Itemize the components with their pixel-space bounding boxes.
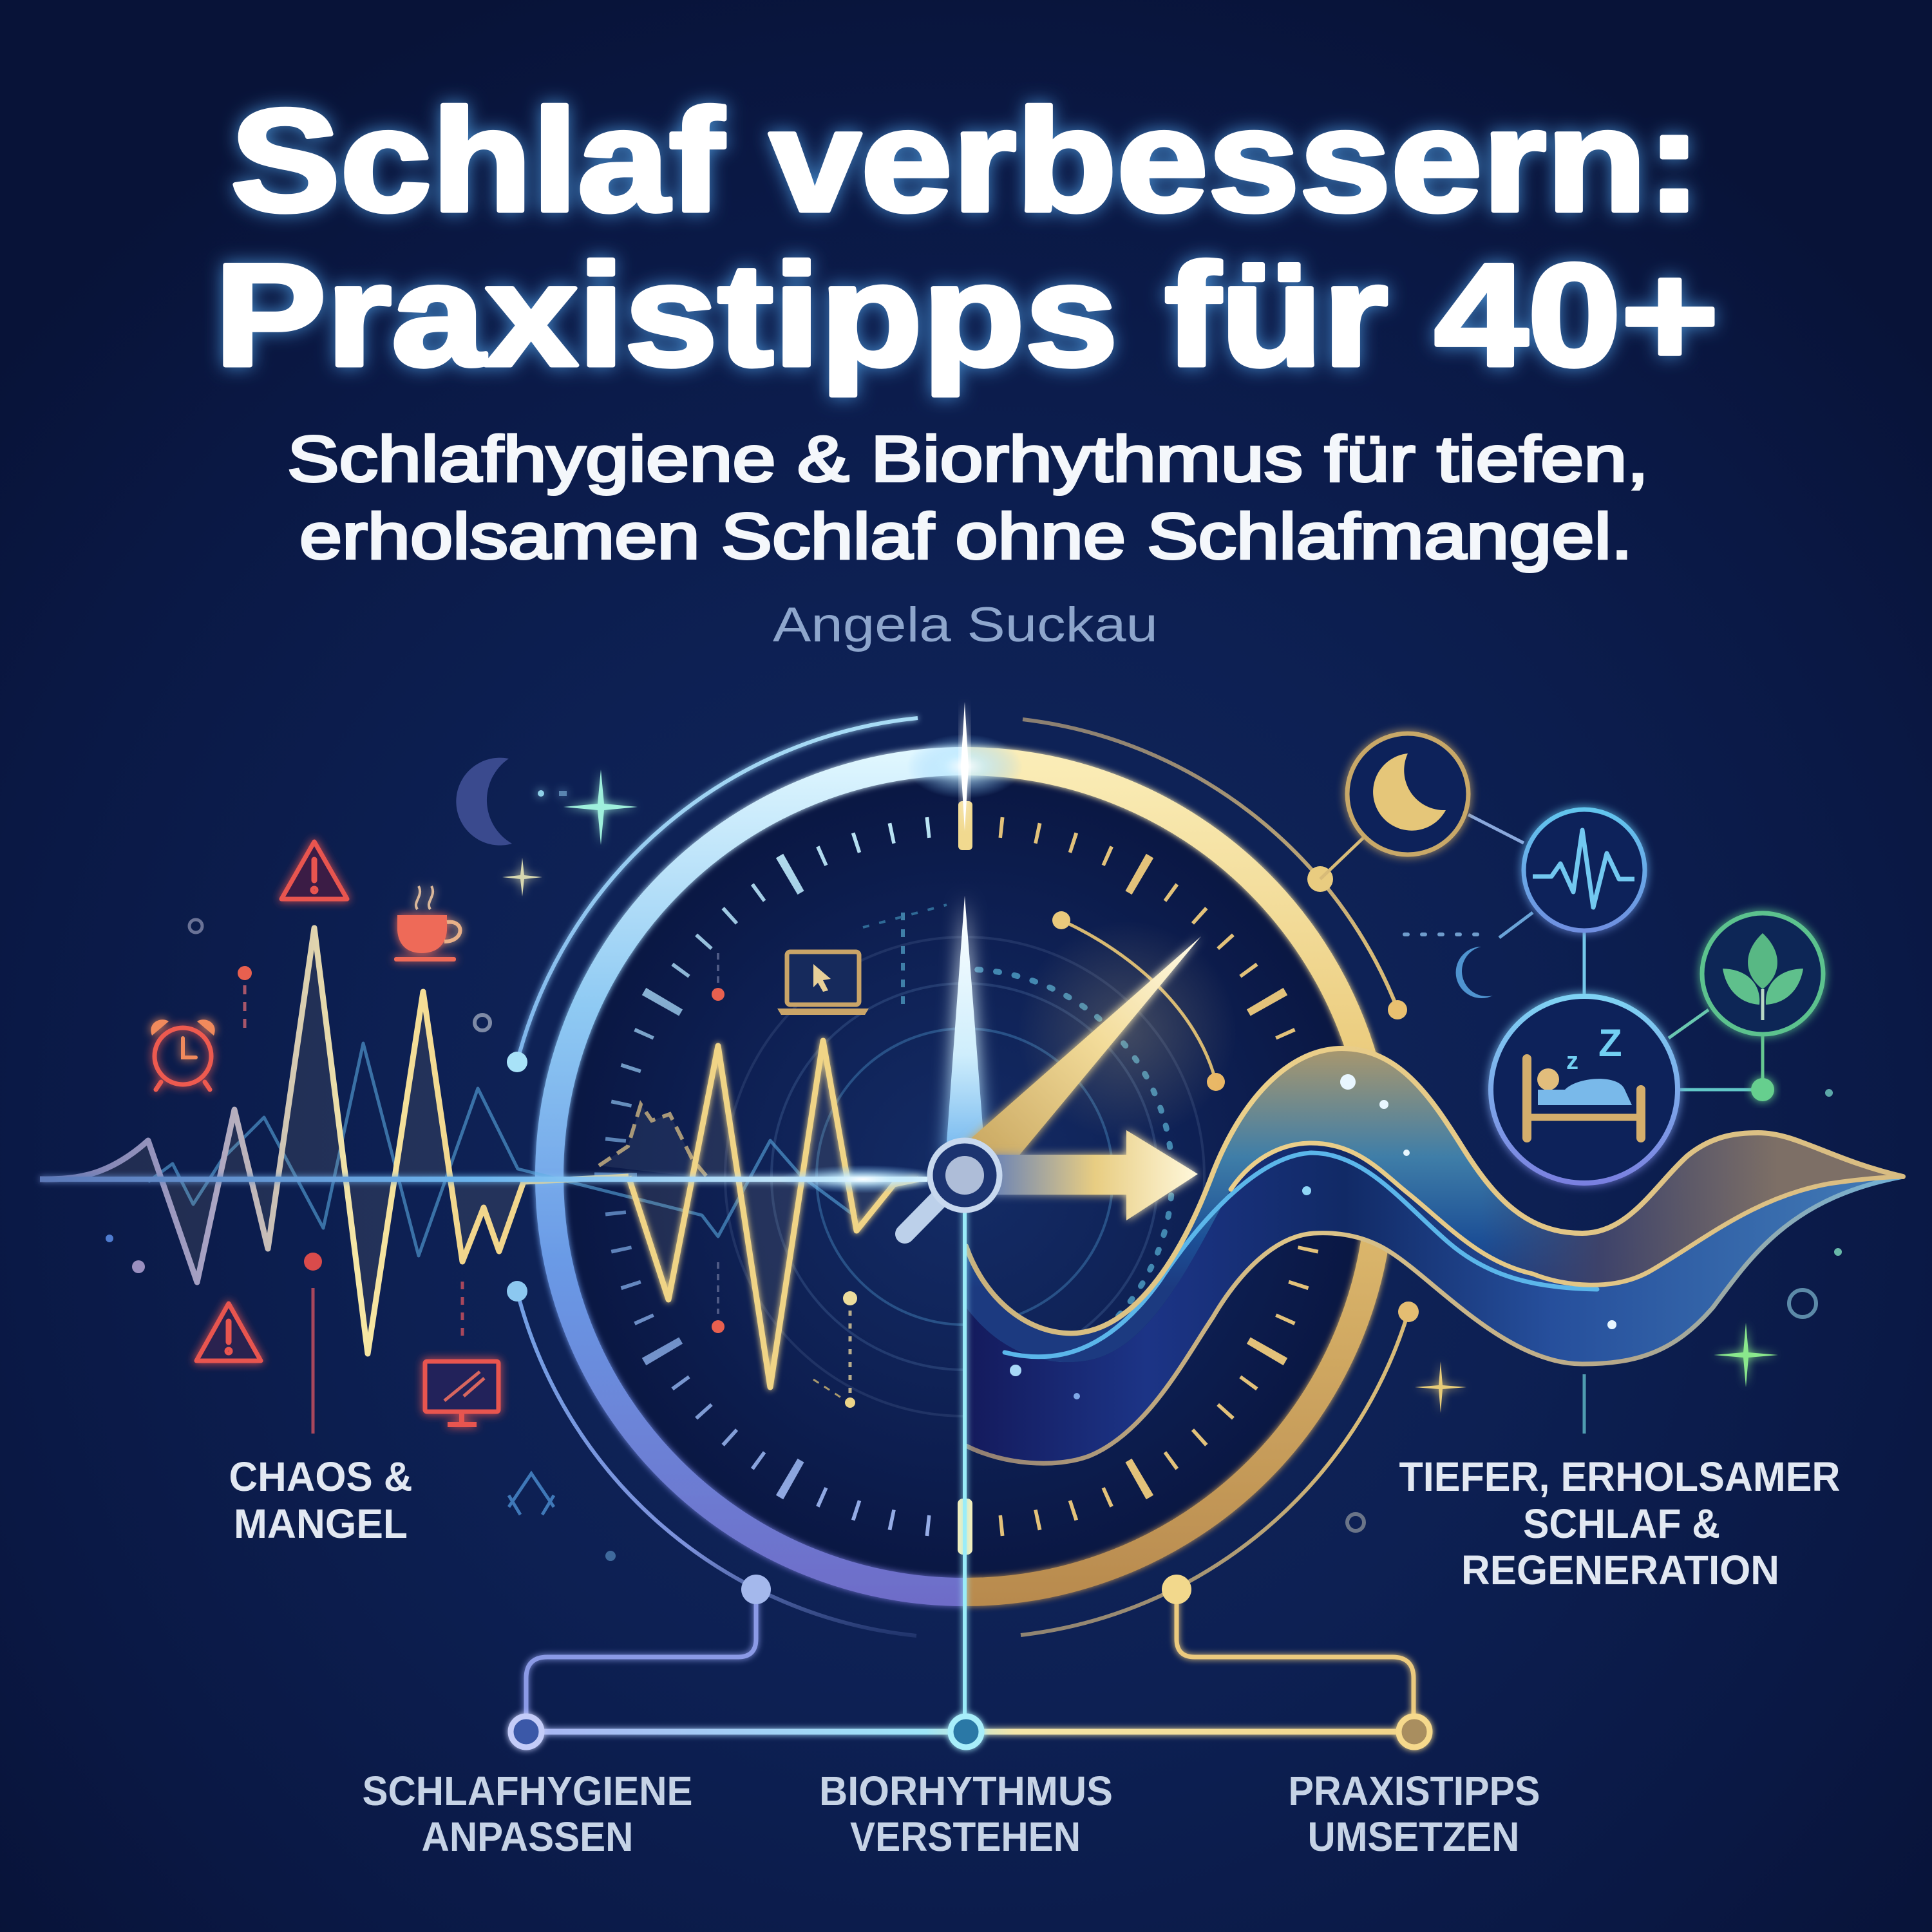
network connector lines [1320, 815, 1763, 1090]
clock [549, 761, 1380, 1592]
ecg chaos pulse [40, 928, 927, 1387]
pulse fill [40, 928, 918, 1387]
clock hub [930, 1141, 999, 1210]
vertical axis line [963, 1179, 967, 1716]
twelve and six o'clock bars [958, 801, 972, 1555]
gold pulse inside clock [629, 1041, 918, 1387]
ribbon wave [966, 1048, 1903, 1463]
inner clock dashed marks [813, 905, 947, 1408]
ribbon right tint [1462, 1133, 1903, 1285]
label: deep sleep: REGENERATION [1461, 1547, 1779, 1593]
label: deep sleep: TIEFER, ERHOLSAMER [1399, 1454, 1841, 1500]
icon: monitor [425, 1361, 498, 1425]
horizontal baseline [40, 1177, 927, 1182]
label: praxistipps: UMSETZEN [1307, 1814, 1520, 1860]
left connector [526, 1589, 756, 1716]
green node [1751, 1078, 1774, 1101]
clock ring [549, 761, 1380, 1592]
connector top dots [741, 1575, 1191, 1604]
clock hand [905, 921, 1236, 1234]
label: praxistipps: PRAXISTIPPS [1288, 1768, 1540, 1814]
icon: crescent moon left [456, 758, 512, 846]
label: schlafhygiene: ANPASSEN [421, 1814, 634, 1860]
icon: warning top [281, 842, 347, 899]
icon: sleep circle: z [1566, 1048, 1578, 1075]
author: Angela Suckau [773, 598, 1158, 652]
icon: stars left [502, 770, 638, 896]
label: biorhythmus: BIORHYTHMUS [819, 1768, 1113, 1814]
ribbon lines [966, 1048, 1903, 1463]
title: Schlaf verbessern: [231, 79, 1701, 242]
clock ghost mountain [599, 1104, 708, 1179]
flare on baseline [779, 1165, 947, 1193]
label: deep sleep: SCHLAF & [1523, 1501, 1720, 1547]
icon: heartbeat circle [1524, 810, 1645, 931]
icon: leaf circle [1702, 913, 1823, 1034]
clock ticks [614, 826, 1316, 1528]
label: schlafhygiene [362, 1768, 693, 1860]
secondary blue pulse [148, 1043, 857, 1256]
icon: sleep circle: Z [1598, 1021, 1622, 1065]
connector nodes [511, 1716, 1430, 1747]
icon: laptop [777, 952, 869, 1015]
connector tree [511, 1575, 1430, 1747]
label: chaos: MANGEL [234, 1501, 408, 1547]
subtitle: Schlafhygiene & Biorhythmus für tiefen, [287, 423, 1649, 495]
label: biorhythmus: VERSTEHEN [850, 1814, 1081, 1860]
ribbon lower band [966, 1143, 1903, 1463]
icon: warning bottom [196, 1303, 261, 1361]
chaos decorations [106, 920, 724, 1434]
label: schlafhygiene: SCHLAFHYGIENE [362, 1768, 693, 1814]
clock face [559, 771, 1370, 1582]
horizontal connector [541, 1728, 1399, 1735]
main pulse line [40, 928, 629, 1354]
top flare [907, 702, 1023, 831]
subtitle: erholsamen Schlaf ohne Schlafmangel. [299, 500, 1633, 573]
title [214, 79, 1719, 396]
icon: moon circle [1347, 734, 1468, 855]
icon: sleep circle [1491, 996, 1678, 1183]
outer arcs [507, 718, 1419, 1636]
ribbon upper band [966, 1048, 1903, 1362]
subtitle [287, 423, 1649, 573]
label: chaos: CHAOS & [229, 1454, 412, 1500]
label: chaos [229, 1454, 412, 1547]
right connector [1177, 1589, 1414, 1716]
icon: coffee cup [394, 886, 460, 961]
icon: small moon [1456, 947, 1493, 998]
icon: alarm clock [151, 1019, 215, 1090]
arrow [985, 1130, 1198, 1220]
clock needle [945, 896, 985, 1159]
label: praxistipps [1288, 1768, 1540, 1860]
title: Praxistipps für 40+ [214, 233, 1719, 396]
ribbon sparkle dots [1010, 1074, 1616, 1399]
label: deep sleep [1399, 1454, 1841, 1593]
icon network: sleep benefits [1320, 734, 1823, 1183]
right decorations [509, 1089, 1842, 1561]
label: biorhythmus [819, 1768, 1113, 1860]
clock inner arcs [725, 911, 1225, 1416]
